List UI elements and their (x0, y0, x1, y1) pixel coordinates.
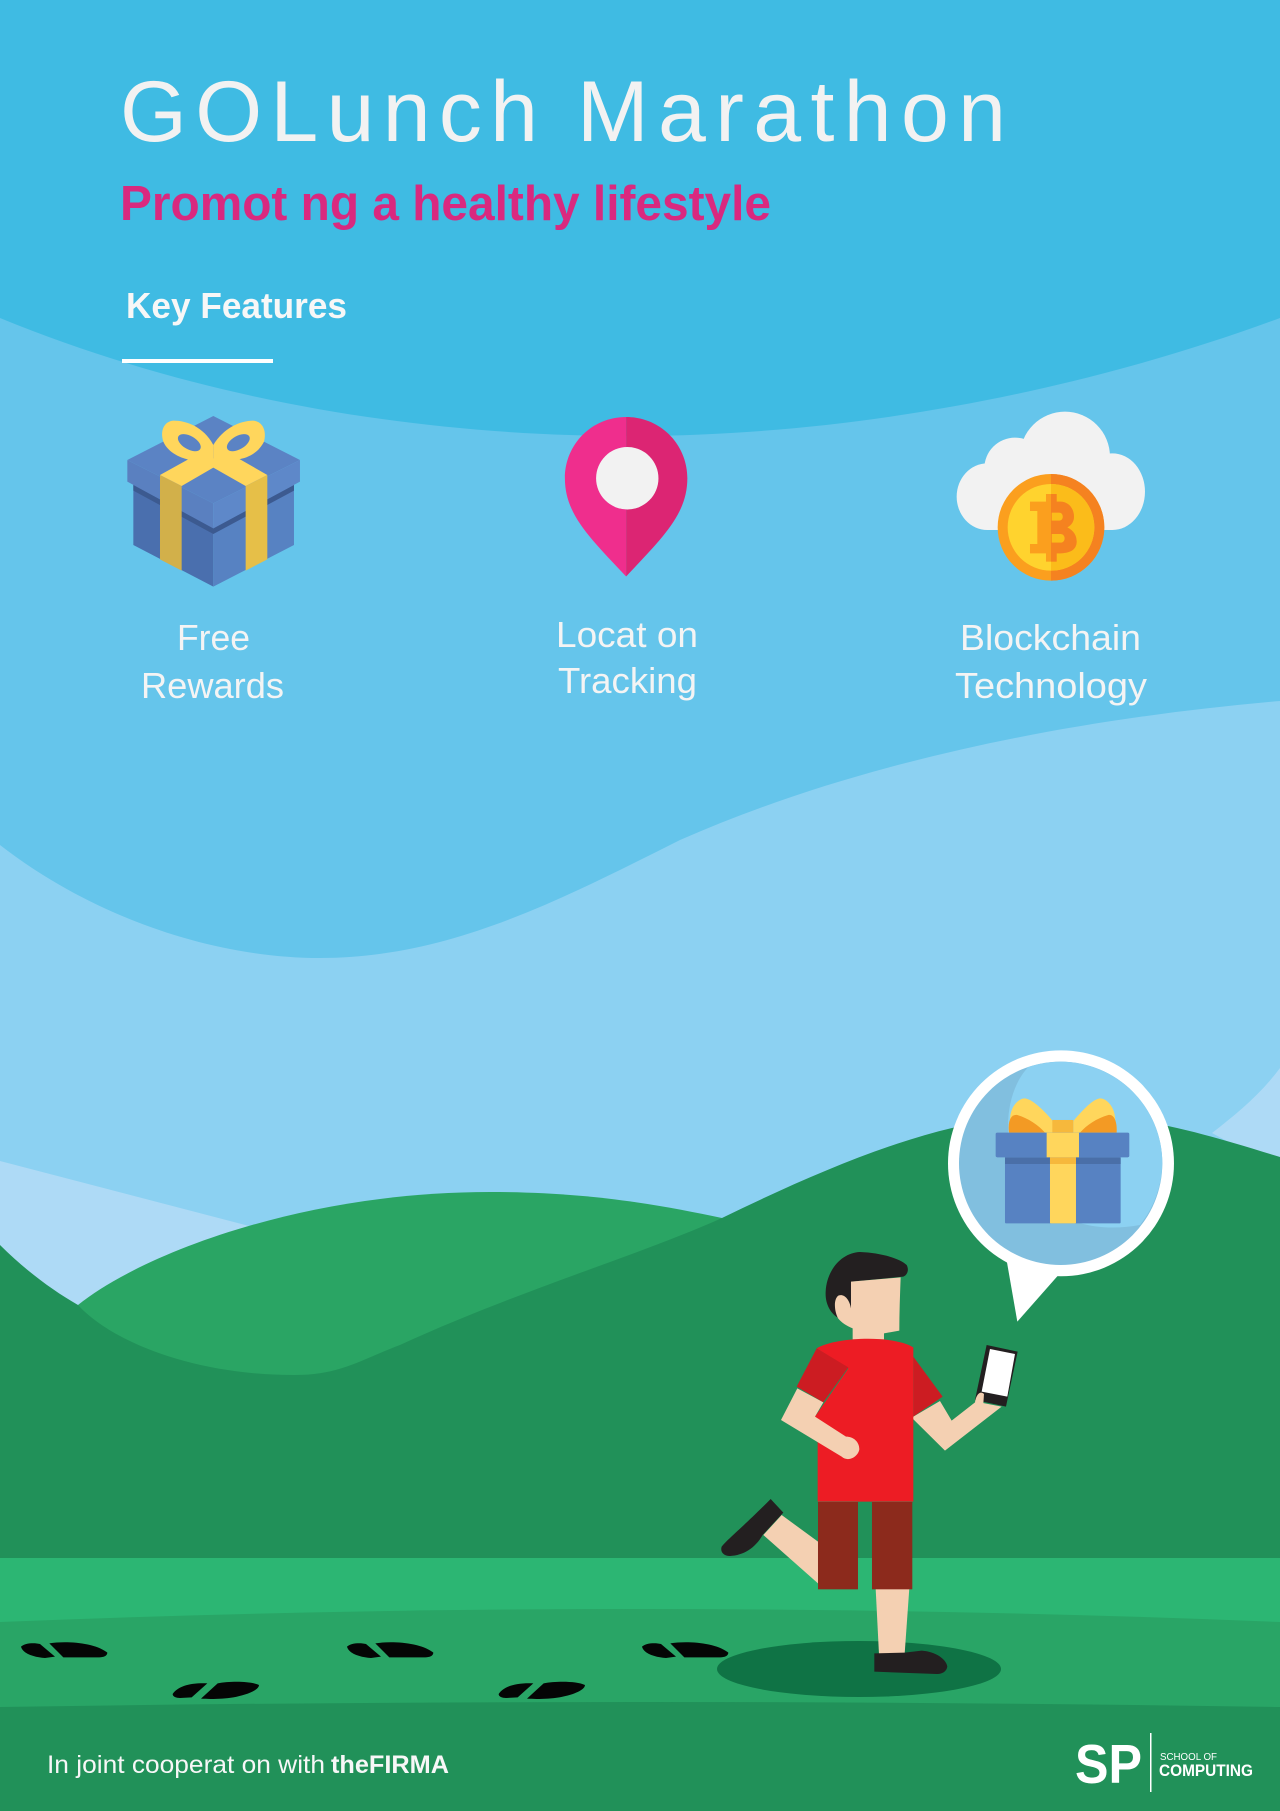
label: location tracking (556, 614, 698, 701)
person shadow (717, 1641, 1001, 1697)
title: GOLunch (120, 64, 538, 160)
footprint 2 (347, 1642, 433, 1658)
logo: SP School of Computing: SP (1075, 1733, 1142, 1795)
face and neck (835, 1277, 901, 1339)
footprints (21, 1642, 728, 1699)
speech bubble with gift (948, 1050, 1174, 1322)
label: free rewards: Free (177, 617, 250, 658)
label: location tracking: Tracking (558, 660, 697, 701)
feature: blockchain technology (955, 412, 1147, 706)
title: Marathon (577, 64, 1006, 160)
hills (0, 1116, 1280, 1811)
icon: gift (996, 1098, 1129, 1223)
runner with phone (721, 1252, 1018, 1674)
near arm (781, 1388, 859, 1459)
back shoe (721, 1499, 783, 1556)
subtitle: Promot ng a healthy lifestyle (120, 177, 771, 231)
icon: location pin (565, 417, 687, 576)
footprint 4 (173, 1682, 259, 1699)
front shoe (874, 1651, 947, 1674)
ground (0, 1558, 1280, 1811)
footer text: theFIRMA (331, 1751, 449, 1779)
legs and shorts (721, 1499, 947, 1674)
label: blockchain technology (955, 617, 1147, 706)
far arm and hand (912, 1401, 1002, 1451)
red shirt (797, 1339, 943, 1502)
footprint 5 (499, 1682, 585, 1699)
label: blockchain technology: Technology (955, 665, 1147, 706)
shorts (818, 1502, 912, 1589)
heading: key features (122, 285, 347, 363)
hair (826, 1252, 908, 1319)
feature: free rewards (127, 416, 300, 706)
logo: SP School of Computing: SCHOOL OF (1160, 1752, 1217, 1763)
logo: SP School of Computing: COMPUTING (1159, 1761, 1253, 1780)
icon: gift box (127, 416, 300, 587)
feature: location tracking (556, 417, 698, 701)
footer text (47, 1751, 449, 1779)
label: location tracking: Locat on (556, 614, 698, 655)
label: free rewards (141, 617, 284, 706)
footprint 1 (21, 1642, 107, 1658)
back leg (763, 1515, 818, 1583)
footprint 3 (642, 1642, 728, 1658)
title (120, 64, 1006, 160)
heading: key features: Key Features (126, 285, 347, 326)
footer text: In joint cooperat on with (47, 1751, 325, 1779)
logo: SP School of Computing (1075, 1733, 1253, 1795)
front leg (876, 1588, 909, 1654)
label: free rewards: Rewards (141, 665, 284, 706)
icon: cloud with bitcoin coin (957, 412, 1145, 581)
upper body (781, 1252, 1018, 1502)
label: blockchain technology: Blockchain (960, 617, 1141, 658)
phone (975, 1345, 1018, 1407)
